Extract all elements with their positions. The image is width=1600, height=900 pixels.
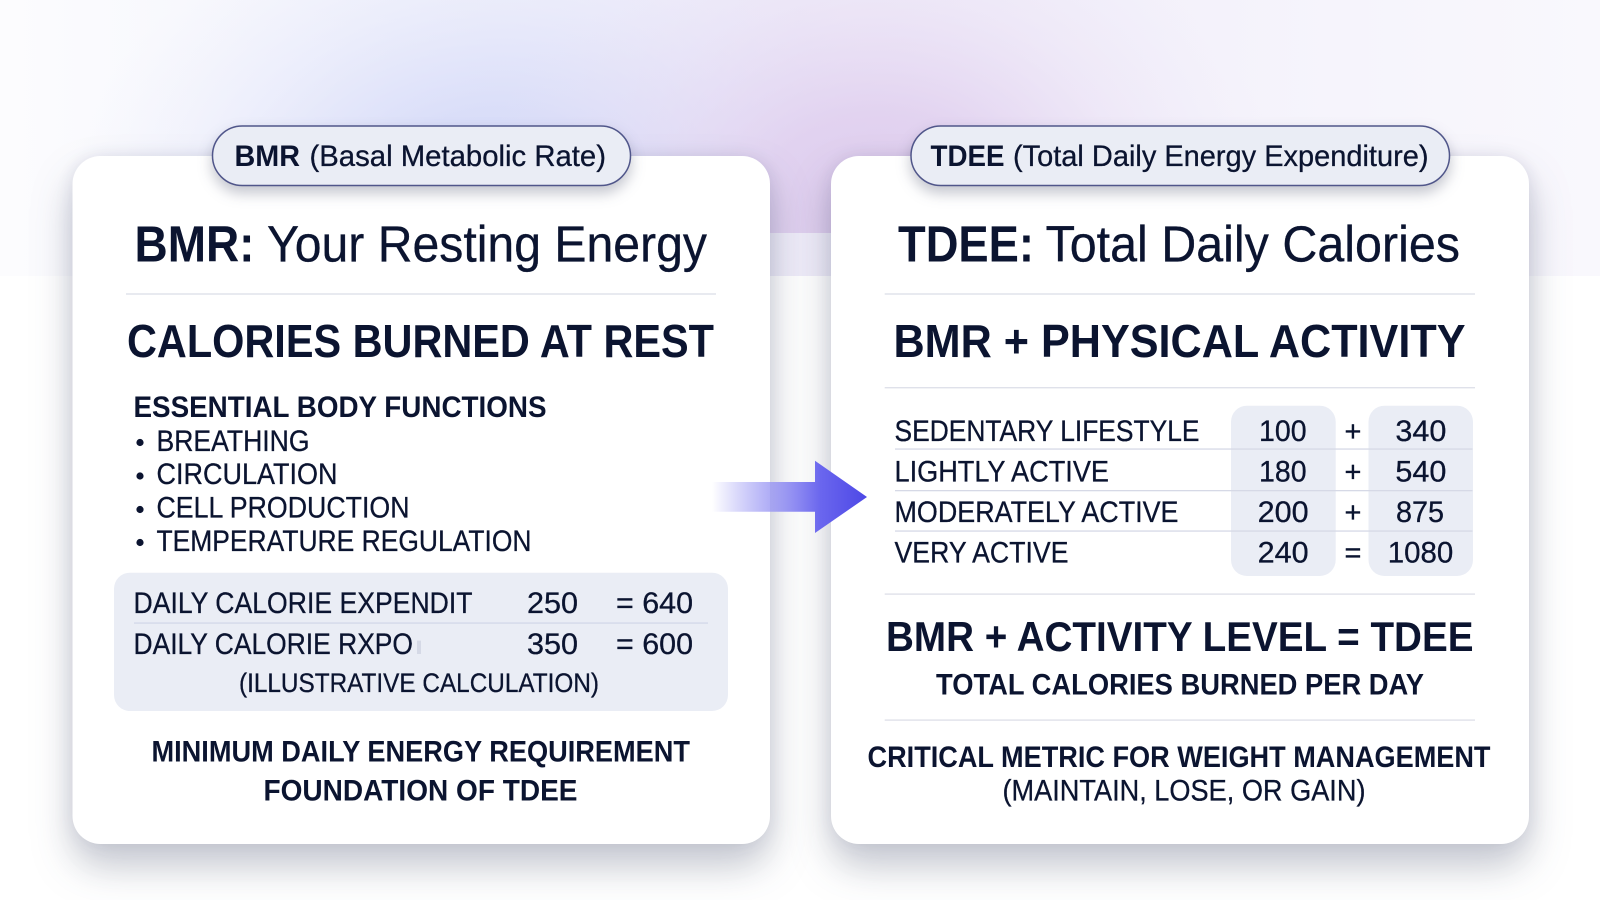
BMR footer text: MINIMUM DAILY ENERGY REQUIREMENT — [152, 736, 690, 769]
BMR footer text — [152, 736, 690, 808]
BMR label pill: BMR — [234, 140, 300, 173]
calorie calculation box: (ILLUSTRATIVE CALCULATION) — [239, 668, 599, 698]
BMR heading: BMR: — [134, 216, 254, 272]
activity level table: 540 — [1395, 456, 1446, 489]
essential body functions list: BREATHING — [156, 425, 310, 458]
subheading: calories burned at rest: CALORIES BURNED AT REST — [127, 315, 714, 367]
TDEE footer text: (MAINTAIN, LOSE, OR GAIN) — [1002, 775, 1366, 808]
formula: BMR + activity level = TDEE — [886, 613, 1474, 702]
calorie calculation box: DAILY CALORIE EXPENDIT — [134, 587, 472, 620]
essential body functions list: ESSENTIAL BODY FUNCTIONS — [134, 391, 546, 424]
BMR label pill — [212, 126, 630, 186]
activity level table: + — [1345, 497, 1361, 529]
activity level table: + — [1345, 457, 1361, 489]
activity level table: SEDENTARY LIFESTYLE — [894, 415, 1200, 448]
calorie calculation box: 250 — [527, 587, 578, 620]
essential body functions list: TEMPERATURE REGULATION — [156, 525, 532, 558]
BMR label pill: (Basal Metabolic Rate) — [310, 140, 606, 173]
BMR heading: Your Resting Energy — [267, 216, 707, 272]
background gradient band — [0, 0, 1600, 276]
TDEE heading: TDEE: — [898, 216, 1034, 272]
TDEE label pill — [911, 126, 1450, 186]
card surface — [831, 156, 1529, 844]
BMR footer text: FOUNDATION OF TDEE — [264, 775, 578, 808]
calorie calculation box: DAILY CALORIE RXPO — [134, 628, 413, 661]
activity level table — [894, 406, 1473, 576]
activity level table: 180 — [1259, 456, 1307, 489]
arrow: BMR to TDEE — [712, 461, 867, 533]
activity level table: VERY ACTIVE — [894, 536, 1068, 569]
activity level table: 100 — [1259, 415, 1307, 448]
calorie calculation box — [114, 573, 728, 711]
activity level table: 240 — [1258, 536, 1309, 569]
TDEE label pill: TDEE — [930, 140, 1004, 173]
TDEE footer text — [868, 741, 1490, 808]
TDEE heading: Total Daily Calories — [1046, 216, 1460, 272]
activity level table: MODERATELY ACTIVE — [894, 496, 1178, 529]
subheading: BMR + physical activity: BMR + PHYSICAL ACTIVITY — [894, 315, 1466, 367]
activity level table: + — [1345, 416, 1361, 448]
panel: BMR card — [72, 126, 770, 844]
essential body functions list: CELL PRODUCTION — [156, 492, 410, 525]
formula: BMR + activity level = TDEE: BMR + ACTIVITY LEVEL = TDEE — [886, 613, 1474, 660]
calorie calculation box: = 600 — [616, 628, 693, 661]
calorie calculation box: 350 — [527, 628, 578, 661]
activity level table: = — [1345, 537, 1361, 569]
activity level table: 340 — [1395, 415, 1446, 448]
essential body functions list: CIRCULATION — [156, 458, 338, 491]
formula: BMR + activity level = TDEE: TOTAL CALORIES BURNED PER DAY — [936, 668, 1424, 702]
TDEE label pill: (Total Daily Energy Expenditure) — [1013, 140, 1428, 173]
card surface — [72, 156, 770, 844]
calorie calculation box: = 640 — [616, 587, 693, 620]
activity level table: 875 — [1396, 496, 1444, 529]
essential body functions list — [134, 391, 546, 558]
activity level table: LIGHTLY ACTIVE — [894, 456, 1109, 489]
activity level table: 200 — [1258, 496, 1309, 529]
TDEE footer text: CRITICAL METRIC FOR WEIGHT MANAGEMENT — [868, 741, 1490, 774]
panel: TDEE card — [831, 126, 1529, 844]
activity level table: 1080 — [1388, 536, 1453, 569]
